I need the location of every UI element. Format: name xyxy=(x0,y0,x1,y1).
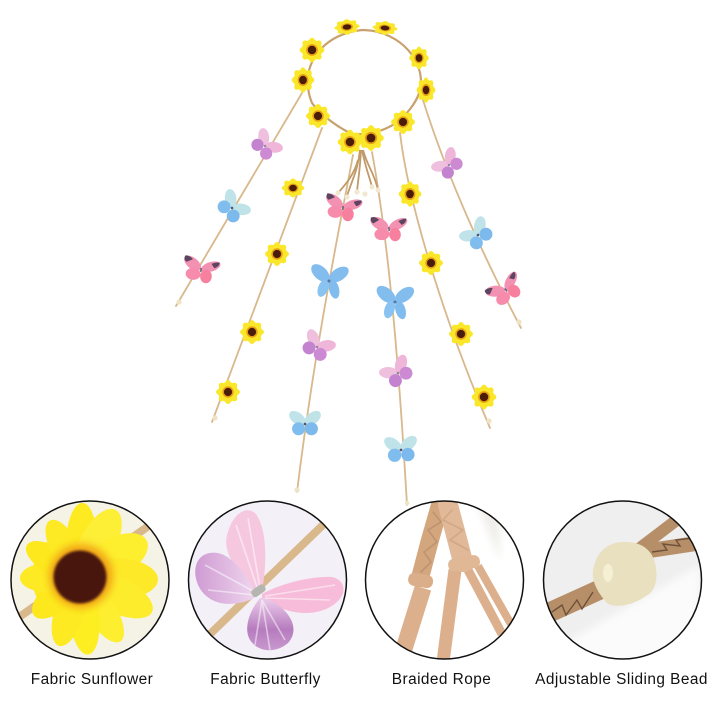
sunflower orange halo xyxy=(49,544,113,608)
two braids xyxy=(420,505,468,578)
wing veins xyxy=(205,518,335,650)
suede cord xyxy=(207,522,326,637)
butterfly top wing xyxy=(226,510,265,592)
detail circle: fabric sunflower xyxy=(11,501,169,659)
butterfly clasp xyxy=(251,584,266,598)
detail circle: adjustable sliding bead xyxy=(544,501,706,670)
sunflower seed disc xyxy=(54,550,106,604)
caption: fabric butterfly: Fabric Butterfly xyxy=(210,671,321,688)
strand end beads xyxy=(176,299,522,505)
hanging suede strands xyxy=(176,93,521,505)
rope twist marks xyxy=(552,538,693,615)
headpiece product photo xyxy=(176,18,530,505)
butterfly bottom wing xyxy=(247,598,293,650)
detail circle: fabric butterfly xyxy=(188,501,346,659)
loose suede strands xyxy=(403,566,512,662)
braided rope headband ring xyxy=(308,30,421,134)
butterfly left wing xyxy=(195,553,256,604)
soft shadow xyxy=(478,510,501,550)
caption: adjustable sliding bead: Adjustable Sliding Bead xyxy=(535,671,708,688)
tassel with wooden beads xyxy=(335,150,381,200)
sunflowers on the strands xyxy=(216,179,496,409)
sunflower petals xyxy=(20,501,160,656)
butterflies on the strands xyxy=(180,123,530,463)
detail circle: braided rope xyxy=(366,500,524,662)
wooden bead xyxy=(593,542,657,606)
sunflowers on the ring xyxy=(292,18,435,154)
bright backdrop xyxy=(574,572,698,658)
caption: braided rope: Braided Rope xyxy=(392,671,491,688)
twisted rope xyxy=(546,516,706,614)
caption: fabric sunflower: Fabric Sunflower xyxy=(31,671,153,688)
butterfly right wing xyxy=(262,577,344,613)
rope behind sunflower xyxy=(15,525,150,620)
braid knots xyxy=(408,573,434,588)
